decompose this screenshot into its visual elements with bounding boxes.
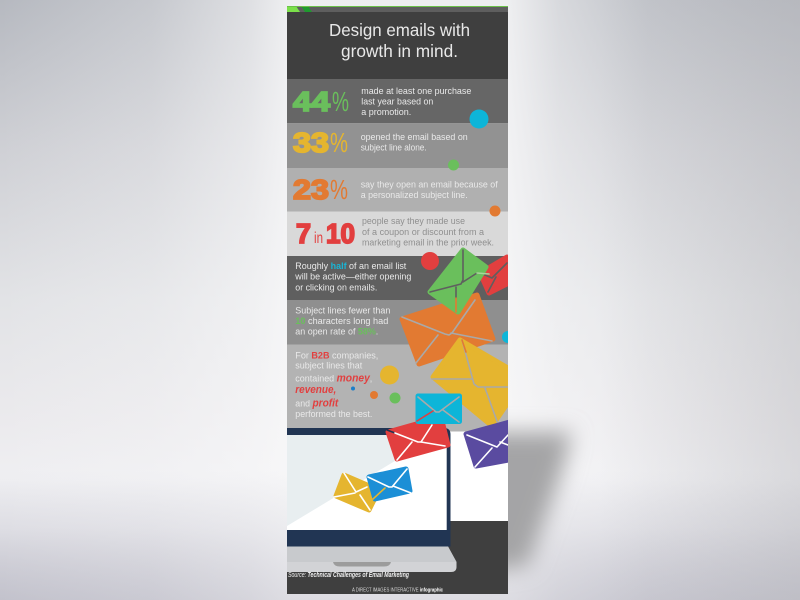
circle: cyan <box>470 110 488 128</box>
text row: B2B: and profit <box>295 398 340 410</box>
stat row: 7 in 10: people say they made use <box>362 216 465 227</box>
footer credit: A DIRECT IMAGES INTERACTIVE infographic <box>352 588 443 594</box>
circle: cyan edge <box>502 331 508 343</box>
stat row: 44%: a promotion. <box>361 107 411 118</box>
stat row: 7 in 10: 7 <box>296 218 311 249</box>
stat row: 23%: % <box>330 174 348 205</box>
circle: small blue <box>351 386 355 390</box>
header: growth in mind. <box>341 41 458 61</box>
circle: green <box>448 160 459 170</box>
stat row: 23%: a personalized subject line. <box>361 190 468 201</box>
stat row: 7 in 10 <box>287 212 508 256</box>
header: Design emails with <box>329 20 470 40</box>
stat row: 44%: % <box>332 86 349 117</box>
text row: B2B: subject lines that <box>295 361 363 372</box>
circle: yellow <box>380 366 399 384</box>
stat row: 33%: % <box>330 127 348 158</box>
envelope: small yellow <box>334 473 379 510</box>
lower dark area <box>287 521 508 594</box>
stat row: 7 in 10: 10 <box>326 218 355 249</box>
stat row: 44%: made at least one purchase <box>361 86 471 97</box>
envelope: small blue <box>368 469 411 499</box>
text row: subject line length <box>287 300 508 344</box>
text row: B2B <box>287 344 508 434</box>
envelope: red top right <box>480 254 508 296</box>
envelope: orange <box>402 295 493 364</box>
text row: B2B: revenue, <box>295 384 336 396</box>
text row: B2B: performed the best. <box>295 409 372 420</box>
stat row: 33% <box>287 123 508 168</box>
envelope: green <box>430 250 489 312</box>
stat row: 44%: 44 <box>293 86 330 117</box>
circle: small green <box>390 392 400 404</box>
envelope: cyan <box>416 394 462 424</box>
stat row: 7 in 10: of a coupon or discount from a <box>362 227 485 238</box>
text row: B2B: contained money, <box>295 373 372 385</box>
envelope: yellow large <box>430 337 508 426</box>
stat row: 33%: opened the email based on <box>361 132 468 143</box>
stat row: 23% <box>287 168 508 212</box>
stat row: 23%: 23 <box>293 174 329 205</box>
text row: half of list active: will be active—either opening <box>294 272 411 283</box>
stat row: 23%: say they open an email because of <box>361 179 498 190</box>
stat row: 33%: 33 <box>293 127 329 158</box>
stat row: 7 in 10: marketing email in the prior week. <box>362 237 494 248</box>
laptop <box>287 428 456 572</box>
stat row: 44% <box>287 79 508 123</box>
envelope: red <box>387 417 448 460</box>
circle: red <box>421 252 439 270</box>
text row: half of list active: Roughly half of an email list <box>295 261 407 272</box>
top strip <box>287 6 508 12</box>
text row: subject line length: Subject lines fewer than <box>295 306 390 317</box>
text row: half of list active: or clicking on emails. <box>295 282 377 293</box>
envelope: purple <box>464 420 508 468</box>
text row: B2B: For B2B companies, <box>295 350 378 361</box>
source line: Source: Technical Challenges of Email Marketing <box>288 570 409 579</box>
text row: half of list active <box>287 256 508 300</box>
stat row: 7 in 10: in <box>314 230 323 247</box>
circle: small orange <box>370 391 378 399</box>
stat row: 33%: subject line alone. <box>361 143 427 154</box>
stat row: 44%: last year based on <box>361 96 433 108</box>
circle: orange <box>490 206 500 216</box>
panel cast shadow <box>480 432 572 572</box>
text row: subject line length: 10 characters long had <box>295 316 388 327</box>
infographic panel <box>287 6 525 594</box>
text row: subject line length: an open rate of 58%. <box>295 327 378 338</box>
header <box>287 12 508 79</box>
white second screen <box>450 432 508 521</box>
